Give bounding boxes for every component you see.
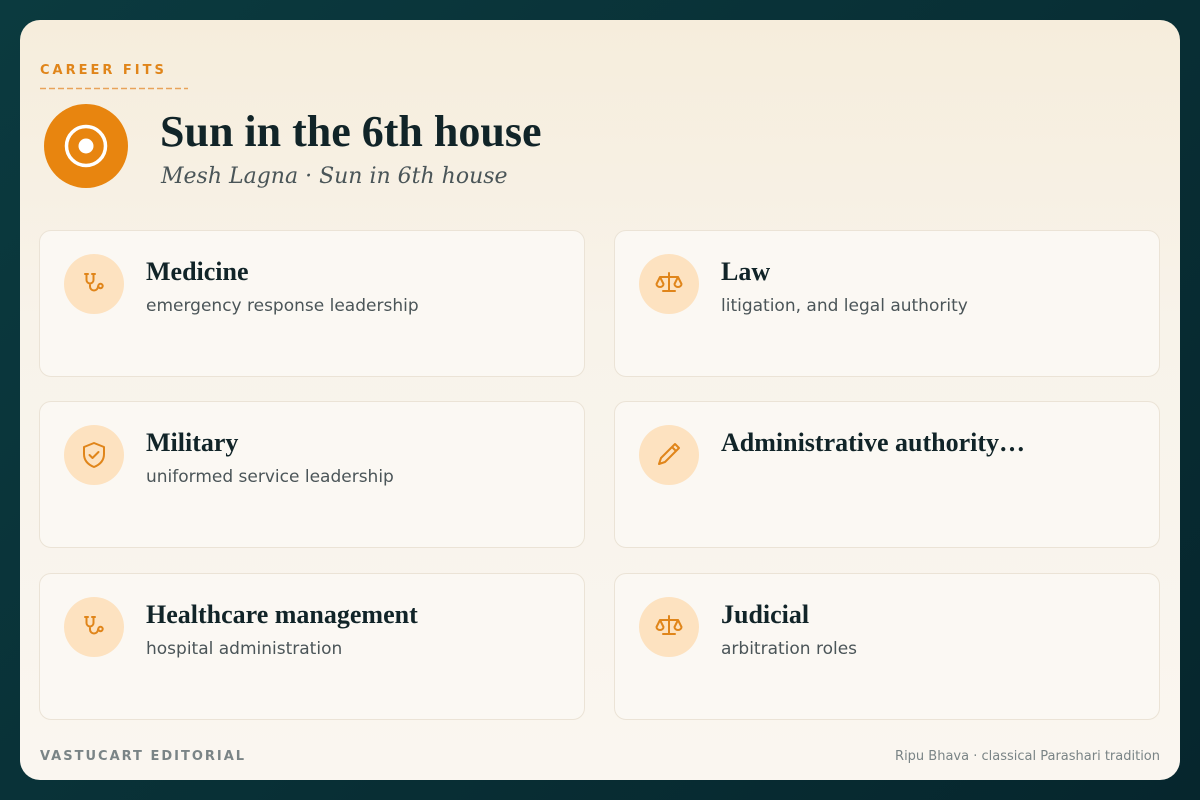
title: Sun in the 6th house [160, 107, 541, 156]
icon: shield [64, 425, 124, 485]
card: healthcare management: hospital administration [146, 639, 342, 659]
card: military: uniformed service leadership [146, 467, 394, 487]
card: healthcare management: Healthcare management [146, 600, 418, 629]
card: administrative authority: Administrative authority… [721, 428, 1025, 457]
card: medicine [39, 230, 585, 377]
footer left: VASTUCART EDITORIAL [40, 749, 246, 764]
card: military [39, 401, 585, 548]
icon: sun symbol [44, 104, 128, 188]
icon: stethoscope [64, 254, 124, 314]
card: judicial: arbitration roles [721, 639, 857, 659]
card: law: Law [721, 257, 770, 286]
icon: scales [639, 254, 699, 314]
card: judicial: Judicial [721, 600, 809, 629]
kicker: career fits: CAREER FITS [40, 63, 167, 78]
card: medicine: Medicine [146, 257, 249, 286]
footer right: Ripu Bhava · classical Parashari tradition [895, 749, 1160, 764]
card: judicial [614, 573, 1160, 720]
card: medicine: emergency response leadership [146, 296, 419, 316]
icon: scales [639, 597, 699, 657]
subtitle: Mesh Lagna · Sun in 6th house [161, 164, 508, 189]
card: law: litigation, and legal authority [721, 296, 968, 316]
card: administrative authority [614, 401, 1160, 548]
icon: pen [639, 425, 699, 485]
card: law [614, 230, 1160, 377]
card: healthcare management [39, 573, 585, 720]
icon: stethoscope [64, 597, 124, 657]
card: military: Military [146, 428, 238, 457]
